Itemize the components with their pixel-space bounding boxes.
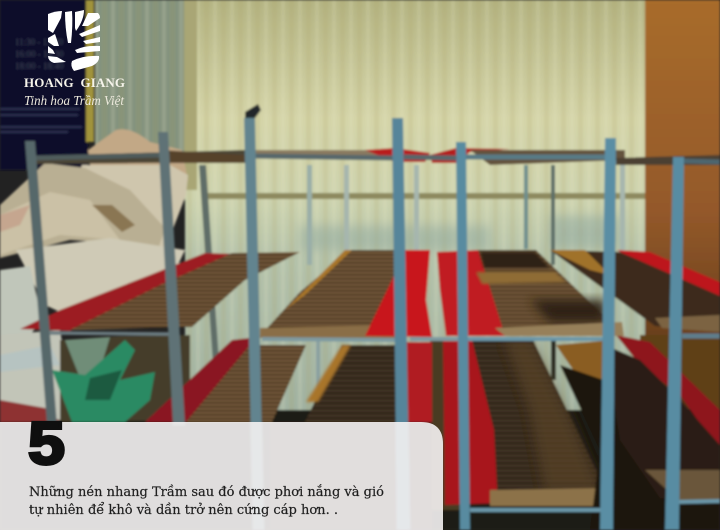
corrugated wall [95, 0, 647, 420]
wooden wall right [645, 0, 720, 420]
lower shelf racks [145, 335, 720, 530]
thin back posts [199, 165, 625, 392]
top shelf [36, 148, 720, 165]
front posts [25, 104, 684, 530]
brand name: HOANG GIANG [24, 75, 125, 90]
green bag and dark heap [52, 335, 190, 422]
step number: 5 [28, 410, 65, 477]
middle shelf: centre left [260, 250, 432, 338]
dark poster: 18:00 - 18:40 [15, 61, 64, 71]
dark poster: 11:30 - 13:30 [15, 37, 64, 47]
caption panel [0, 422, 443, 530]
dark poster [0, 0, 94, 170]
floor [0, 410, 720, 530]
caption text [29, 484, 384, 517]
sacks [0, 129, 188, 422]
middle shelf: left [20, 252, 300, 331]
dark poster: 16:00 - 18:30 [15, 49, 64, 59]
icon: tree [48, 10, 100, 71]
middle shelf: right [550, 250, 720, 332]
caption text: tự nhiên để khô và dần trở nên cứng cáp hơn. . [29, 502, 338, 517]
caption text: Những nén nhang Trầm sau đó được phơi nắng và gió [29, 484, 384, 499]
tagline: Tinh hoa Trầm Việt [24, 94, 125, 109]
middle shelf: centre right [437, 250, 624, 336]
brand logo [24, 10, 125, 109]
rails [36, 155, 720, 510]
